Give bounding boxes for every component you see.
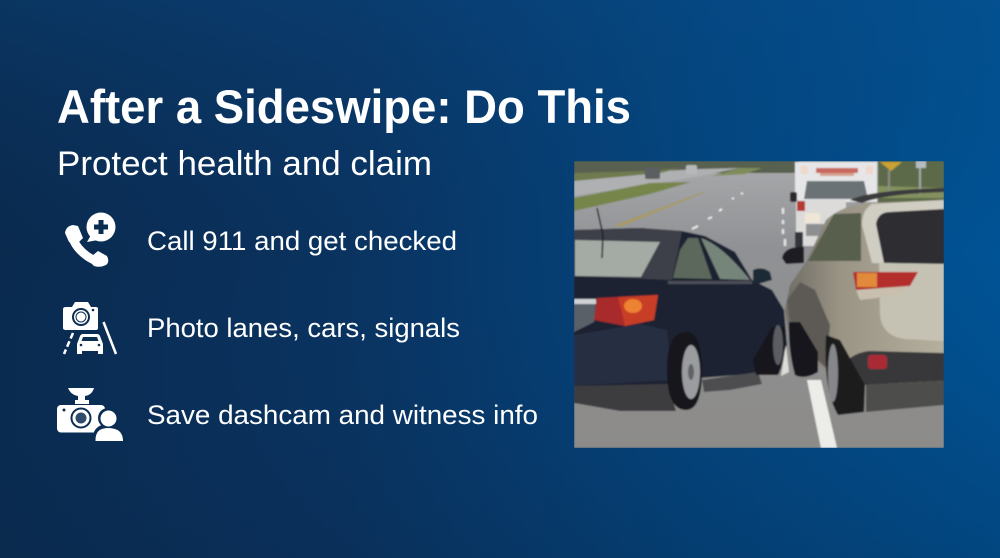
step: photo bbox=[63, 302, 460, 354]
silver SUV bbox=[782, 188, 944, 415]
photo background bbox=[574, 161, 944, 246]
icon: phone with medical cross bbox=[65, 212, 116, 267]
label: call 911: Call 911 and get checked bbox=[147, 226, 457, 256]
title: After a Sideswipe: Do This bbox=[57, 80, 631, 133]
subtitle: Protect health and claim bbox=[57, 145, 432, 183]
lane stripe bbox=[807, 380, 837, 448]
icon: dashcam with witness bbox=[57, 388, 126, 443]
label: dashcam: Save dashcam and witness info bbox=[147, 400, 538, 430]
step: call 911 bbox=[65, 212, 457, 267]
step: dashcam bbox=[57, 388, 538, 443]
black sedan bbox=[574, 208, 787, 411]
ambulance bbox=[790, 162, 877, 247]
icon: camera with car and lanes bbox=[63, 302, 116, 354]
label: photo: Photo lanes, cars, signals bbox=[147, 313, 460, 343]
photo: sideswiped cars on road with ambulance bbox=[574, 161, 944, 448]
